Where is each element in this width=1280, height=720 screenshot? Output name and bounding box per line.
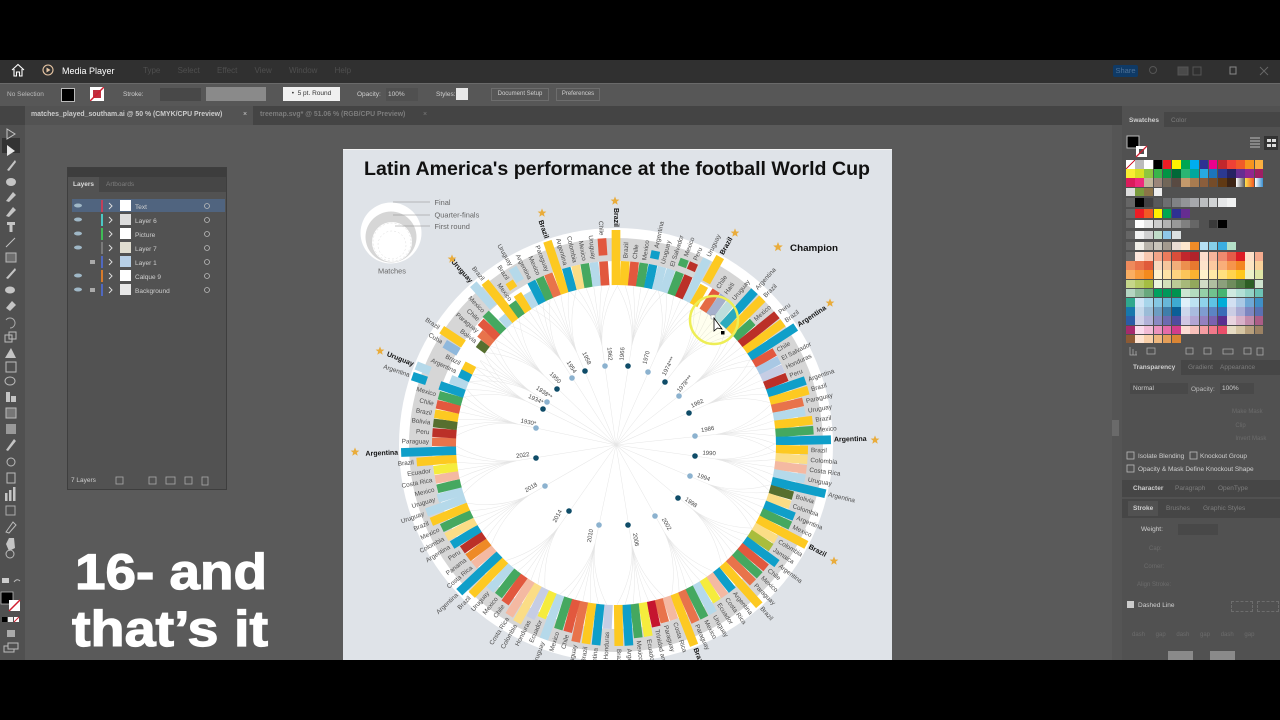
- transparency options: Isolate Blending: [1138, 453, 1184, 460]
- gray band: [420, 250, 812, 640]
- graphic styles tab: Graphic Styles: [1203, 505, 1245, 512]
- country labels: Colombia: [777, 539, 804, 559]
- tab bar: [0, 106, 1122, 125]
- country labels: Argentina: [514, 253, 533, 281]
- country labels: Ecuador: [645, 639, 656, 664]
- swatches: footer icons: [1130, 347, 1264, 356]
- year labels: 1934*: [527, 394, 544, 406]
- country labels: Uruguay: [532, 640, 547, 666]
- year labels: 2022: [516, 452, 531, 460]
- year labels: 1994: [696, 473, 711, 483]
- country labels: Chile: [560, 634, 571, 650]
- paragraph tab: Paragraph: [1175, 485, 1205, 492]
- tab text: Layers: Layers: [73, 181, 94, 188]
- country labels: Argentina: [731, 591, 754, 617]
- active tab: [1122, 112, 1164, 127]
- country labels: Argentina: [807, 368, 836, 383]
- country labels: Brazil: [415, 407, 432, 417]
- icon: home: [12, 64, 24, 76]
- year labels: 1982: [690, 398, 705, 410]
- control: brush definition: [283, 87, 340, 101]
- country labels: Paraguay: [693, 623, 711, 652]
- text: color: Color: [1171, 117, 1187, 124]
- country labels: Brazil: [807, 544, 827, 559]
- control: opacity label: Opacity:: [357, 91, 381, 98]
- chart: radial rings and bars: [365, 208, 867, 687]
- country labels: Mexico: [759, 575, 779, 594]
- opacity value: [1220, 383, 1254, 394]
- country labels: Costa Rica: [446, 564, 475, 590]
- stroke tab: Stroke: [1133, 505, 1153, 512]
- country labels: Haiti: [723, 281, 736, 296]
- country labels: Colombia: [419, 536, 446, 555]
- country labels: Honduras: [514, 619, 533, 647]
- year labels: 2006: [631, 533, 639, 548]
- year labels: 1938**: [534, 386, 553, 401]
- legend: ring key for matches: [360, 198, 480, 276]
- country labels: Brazil: [719, 236, 734, 256]
- country labels: Uruguay: [706, 233, 723, 258]
- country labels: Chile: [597, 221, 605, 236]
- tab label gradient: Gradient: [1188, 364, 1213, 371]
- country labels: Brazil: [444, 353, 461, 367]
- country labels: El Salvador: [669, 234, 686, 268]
- swatches: tint ramps: [1126, 252, 1263, 343]
- country labels: Uruguay: [470, 590, 492, 613]
- country labels: Uruguay: [400, 510, 426, 525]
- country labels: Ecuador: [528, 618, 544, 644]
- blend mode: [1130, 383, 1188, 394]
- year labels: 2018: [524, 482, 539, 494]
- scrollbar thumb: [1112, 420, 1119, 436]
- legend: ring key for matches: Matches: [378, 266, 406, 276]
- control: stroke swatch: [90, 87, 104, 101]
- country labels: Argentina: [797, 305, 828, 329]
- icon: cursor arrow: [711, 315, 724, 334]
- year labels: 1950: [548, 371, 562, 386]
- country labels: Argentina: [777, 563, 804, 585]
- country labels: Mexico: [420, 526, 441, 542]
- country labels: Brazil: [810, 382, 828, 393]
- panel: right dock: [1122, 106, 1280, 660]
- fill and stroke chips: [1126, 136, 1148, 158]
- year labels: 1962: [605, 347, 613, 361]
- dashed line checkbox: [1127, 601, 1134, 608]
- country labels: Uruguay: [807, 403, 833, 415]
- country labels: Costa Rica: [809, 467, 841, 478]
- opentype tab: OpenType: [1218, 485, 1248, 492]
- country labels: Argentina: [425, 544, 452, 564]
- country labels: Brazil: [537, 219, 549, 240]
- tab text: Artboards: Artboards: [106, 181, 134, 188]
- country labels: Mexico: [753, 304, 773, 323]
- country labels: Mexico: [816, 425, 837, 434]
- country labels: Argentina: [382, 363, 411, 379]
- country labels: Peru: [789, 368, 804, 380]
- control: gray variable width box: [206, 87, 266, 101]
- country labels: Paraguay: [402, 438, 430, 446]
- country labels: Argentina: [590, 647, 600, 676]
- disabled mask options: Make Mask Clip Invert Mask: [1232, 409, 1266, 442]
- window icons: [1149, 66, 1268, 76]
- year labels: 2014: [552, 509, 564, 524]
- country labels: Honduras: [603, 632, 611, 660]
- country labels: Uruguay: [411, 496, 437, 510]
- country labels: Jamaica: [771, 547, 795, 566]
- country labels: Mexico: [577, 240, 587, 262]
- year labels: 1998: [683, 497, 698, 510]
- country labels: Mexico: [495, 282, 513, 303]
- country labels: Colombia: [792, 503, 820, 519]
- country labels: Argentina: [827, 491, 856, 505]
- country labels: Costa Rica: [671, 621, 688, 654]
- country labels: Brazil: [470, 265, 485, 282]
- country labels: Brazil: [815, 415, 832, 424]
- country labels: Mexico: [526, 255, 541, 277]
- opacity: Opacity:: [1191, 386, 1215, 393]
- country labels: Brazil: [758, 606, 774, 622]
- year nodes: [533, 363, 698, 528]
- country labels: Brazil: [612, 208, 619, 227]
- weight input: [1178, 524, 1218, 535]
- country labels: Peru: [777, 302, 793, 316]
- country labels: [365, 208, 867, 687]
- layers rows: [72, 199, 225, 296]
- stroke tab strip: [1122, 499, 1280, 518]
- active tab: layers: [68, 177, 99, 192]
- inner white disc: [456, 285, 776, 605]
- country labels: Brazil: [398, 459, 414, 468]
- toolbar: left tools: [0, 125, 25, 660]
- country labels: Mexico: [635, 640, 644, 662]
- year labels: 1970: [642, 350, 652, 365]
- country labels: Mexico: [641, 239, 651, 261]
- arrowheads gray boxes: [1168, 651, 1193, 660]
- footer: layer count: 7 Layers: [71, 477, 96, 484]
- country labels: Paraguay: [567, 643, 579, 672]
- country labels: Brazil: [456, 595, 473, 611]
- country labels: Brazil: [762, 283, 779, 299]
- control: document setup: Document Setup: [498, 91, 542, 97]
- country labels: Uruguay: [711, 614, 730, 639]
- country labels: Peru: [692, 246, 704, 262]
- country labels: Chile: [766, 567, 782, 582]
- stroke tab: [1128, 501, 1158, 516]
- country labels: Trinidad and Tobago: [653, 629, 672, 687]
- control: document setup: [491, 88, 549, 101]
- checkboxes: [1126, 452, 1198, 472]
- country labels: Brazil: [784, 309, 801, 324]
- country labels: Mexico: [548, 631, 561, 653]
- dashed line text: Dashed Line: [1138, 602, 1174, 609]
- country labels: Bolivia: [411, 417, 431, 427]
- country labels: El Salvador: [780, 340, 813, 362]
- country labels: Panama: [445, 557, 468, 577]
- country labels: Colombia: [565, 236, 578, 264]
- country labels: Colombia: [810, 457, 838, 466]
- footer icons: [116, 476, 208, 486]
- tab label appearance: Appearance: [1220, 364, 1255, 371]
- control: styles label: Styles:: [436, 91, 456, 98]
- layer names: Text Layer 6 Picture Layer 7 Layer 1 Calque 9 Background: [135, 204, 170, 295]
- country labels: Argentina: [435, 592, 460, 616]
- country labels: Bolivia: [458, 328, 478, 345]
- country labels: Mexico: [702, 619, 718, 641]
- country labels: Paraguay: [805, 392, 834, 405]
- country labels: Brazil: [580, 646, 589, 663]
- control: preferences: Preferences: [562, 91, 594, 97]
- bars per participation: [401, 230, 831, 647]
- year labels: 1954: [565, 360, 577, 375]
- country labels: Brazil: [413, 520, 430, 533]
- outer white ring: [399, 228, 833, 662]
- big caption: 16- and: [75, 544, 267, 600]
- year labels: 1978***: [676, 374, 694, 394]
- swatches: colour groups: [1126, 198, 1236, 250]
- country labels: Costa Rica: [488, 616, 511, 646]
- list and grid view icons: [1250, 136, 1278, 150]
- country labels: Uruguay: [731, 278, 752, 302]
- country labels: Paraguay: [533, 245, 550, 273]
- country labels: Paraguay: [752, 582, 777, 607]
- country labels: Brazil: [424, 317, 441, 331]
- menu bar: [0, 60, 1280, 83]
- control: opacity value: 100%: [388, 91, 405, 98]
- tab strip: [68, 177, 226, 192]
- year labels: 1966: [619, 346, 627, 361]
- panel: layers: [67, 167, 227, 490]
- year labels: 1930*: [520, 418, 537, 428]
- big caption: [72, 544, 268, 657]
- year labels: 1958: [580, 351, 592, 366]
- country labels: Brazil: [811, 447, 827, 455]
- blend mode: Normal: [1133, 385, 1154, 392]
- country labels: Chile: [492, 603, 507, 620]
- year labels: 2002: [660, 517, 672, 532]
- country labels: Peru: [447, 549, 462, 562]
- country labels: Costa Rica: [401, 477, 433, 490]
- year labels: [516, 346, 717, 548]
- country labels: Argentina: [430, 357, 458, 375]
- opacity value: 100%: [1222, 385, 1239, 392]
- active document tab: [25, 106, 253, 125]
- highlight: yellow cursor ring: [690, 296, 738, 344]
- champion stars on the chart: [351, 196, 879, 565]
- tab title: active: matches_played_southam.ai @ 50 % (CMYK/CPU Preview): [31, 111, 222, 118]
- country labels: Mexico: [791, 524, 813, 539]
- swatches tab strip: [1122, 112, 1280, 127]
- tab labels: transparency: Transparency: [1133, 364, 1175, 371]
- legend: champion star key: [773, 242, 838, 253]
- country labels: Mexico: [415, 386, 437, 398]
- country labels: Argentina: [653, 220, 666, 249]
- icon: media player: [42, 64, 54, 76]
- arrowheads gray box two: [1210, 651, 1235, 660]
- dashes boxes: [1231, 601, 1253, 612]
- country labels: Bolivia: [795, 494, 815, 506]
- country labels: Chile: [776, 340, 792, 354]
- active tab transparency: [1122, 360, 1181, 375]
- letterbox: bottom: [0, 660, 1280, 720]
- dash and gap labels: dash gap dash gap dash gap: [1132, 632, 1254, 638]
- control: fill swatch: [61, 88, 75, 102]
- country labels: Cuba: [427, 332, 444, 346]
- country labels: Ecuador: [407, 468, 432, 478]
- legend: champion star key: Champion: [790, 243, 838, 253]
- tab title: inactive: treemap.svg* @ 51.06 % (RGB/CPU Preview): [260, 111, 405, 118]
- character tab: Character: [1133, 485, 1163, 492]
- legend: ring key for matches: Final: [434, 198, 451, 207]
- country labels: Brazil: [495, 264, 510, 282]
- control: stroke label: Stroke:: [123, 91, 144, 98]
- country labels: Argentina: [754, 266, 778, 292]
- disabled stroke options: Cap: Corner: Align Stroke:: [1134, 546, 1171, 588]
- country labels: Colombia: [500, 623, 519, 650]
- country labels: Brazil: [615, 649, 622, 665]
- country labels: Paraguay: [662, 624, 676, 653]
- knockout: Knockout Group: [1200, 453, 1247, 460]
- canvas scrollbar: [1112, 125, 1122, 660]
- share button: [1113, 65, 1138, 77]
- country labels: Mexico: [482, 596, 500, 616]
- country labels: Costa Rica: [723, 597, 748, 626]
- country labels: Uruguay: [807, 477, 833, 488]
- country labels: Uruguay: [386, 351, 415, 368]
- brushes tab: Brushes: [1166, 505, 1190, 512]
- country labels: Uruguay: [495, 243, 514, 268]
- transparency tab strip: [1122, 360, 1280, 375]
- text: media player: Media Player: [62, 66, 115, 76]
- year labels: 1974***: [662, 356, 677, 377]
- country labels: Mexico: [683, 236, 697, 258]
- menu items: Type Select Effect View Window Help: [143, 66, 351, 75]
- country labels: Brazil: [691, 647, 705, 667]
- control: stroke weight input: [160, 88, 201, 101]
- swatches: colour grid: [1126, 160, 1263, 196]
- control: style swatch: [456, 88, 468, 100]
- control: no selection: No Selection: [7, 91, 44, 98]
- country labels: Brazil: [622, 242, 630, 258]
- big caption: that’s it: [72, 601, 268, 657]
- country labels: Paraguay: [454, 312, 480, 335]
- character tab strip: [1122, 480, 1280, 497]
- country labels: Uruguay: [587, 235, 597, 261]
- country labels: Argentina: [365, 450, 398, 458]
- country labels: Uruguay: [660, 239, 673, 265]
- tab close inactive: ×: [423, 111, 427, 118]
- country labels: Mexico: [466, 295, 486, 315]
- country labels: Mexico: [414, 487, 436, 498]
- control: preferences: [556, 88, 600, 101]
- country labels: Argentina: [625, 648, 634, 677]
- panel header bar: [68, 168, 226, 177]
- country labels: Ecuador: [715, 602, 735, 627]
- country labels: Chile: [632, 244, 640, 259]
- year labels: 2010: [587, 528, 595, 543]
- letterbox: top: [0, 0, 1280, 60]
- dashes box two: [1257, 601, 1279, 612]
- share button: Share: [1115, 66, 1136, 75]
- title: Latin America's performance at the football World Cup: [364, 158, 870, 180]
- tree spokes from centre to bars: [454, 283, 778, 607]
- country labels: Argentina: [795, 515, 824, 532]
- artboard: infographic background: [343, 149, 892, 660]
- country labels: Uruguay: [449, 259, 474, 285]
- country labels: Honduras: [785, 353, 813, 371]
- country labels: Peru: [416, 428, 430, 436]
- country labels: Argentina: [554, 238, 568, 266]
- country labels: Argentina: [834, 436, 867, 444]
- country labels: Chile: [465, 308, 481, 323]
- opacity mask: Opacity & Mask Define Knockout Shape: [1138, 466, 1254, 473]
- year labels: 1986: [701, 426, 716, 434]
- year labels: 1990: [702, 451, 717, 457]
- text: swatches: Swatches: [1129, 117, 1159, 124]
- tab close: ×: [243, 111, 247, 118]
- weight field: Weight:: [1141, 526, 1163, 533]
- country labels: Chile: [419, 397, 435, 408]
- country labels: Chile: [715, 274, 729, 290]
- control: opacity value: [386, 88, 418, 101]
- control bar: [0, 83, 1280, 106]
- legend: ring key for matches: First round: [434, 222, 470, 231]
- control: brush definition: • 5 pt. Round: [292, 90, 331, 97]
- legend: ring key for matches: Quarter-finals: [434, 210, 480, 220]
